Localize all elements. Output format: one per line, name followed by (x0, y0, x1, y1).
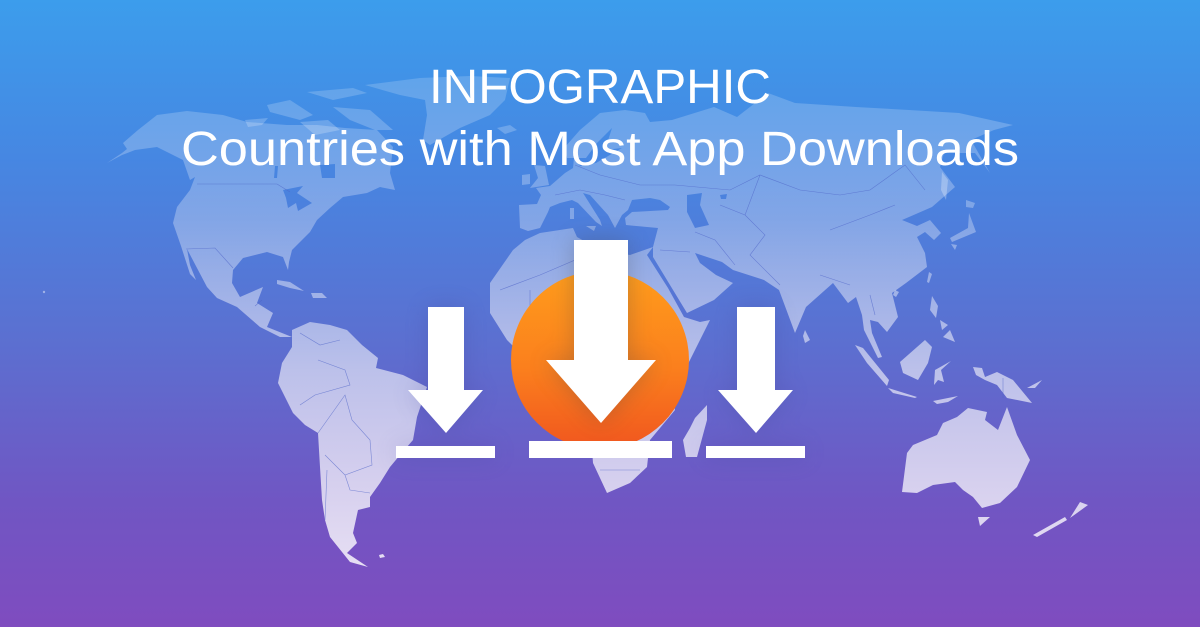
Sulawesi (934, 361, 951, 385)
Madagascar (683, 405, 707, 457)
title line 1: INFOGRAPHIC (429, 61, 771, 114)
icon: right download arrow (706, 307, 805, 458)
Java and lesser islands (888, 388, 958, 404)
icon: left download arrow (396, 307, 495, 458)
Africa (490, 228, 710, 493)
Japan (941, 172, 976, 250)
New Zealand (1033, 502, 1088, 537)
Hawaii (43, 291, 45, 293)
title (181, 61, 1019, 176)
Borneo (900, 340, 932, 380)
Iceland (497, 125, 517, 134)
Caribbean islands (277, 280, 327, 298)
Eurasia (519, 93, 1013, 358)
Mediterranean islands (570, 208, 596, 231)
South America (278, 322, 427, 567)
Tasmania (978, 517, 990, 526)
Australia (902, 407, 1030, 508)
Falkland Islands (379, 554, 385, 558)
New Guinea (973, 367, 1042, 403)
icon: orange circle with centre download arrow (511, 240, 689, 458)
title line 2: Countries with Most App Downloads (181, 123, 1019, 176)
Taiwan and Hainan (893, 272, 932, 297)
country borders (186, 165, 1003, 520)
Philippines (930, 296, 955, 342)
Greenland (365, 76, 510, 145)
Sumatra (855, 345, 889, 386)
Arctic islands (245, 88, 393, 135)
North America (107, 111, 395, 337)
world map (43, 76, 1088, 567)
Britain and Ireland (522, 165, 549, 188)
Sri Lanka (803, 330, 810, 343)
